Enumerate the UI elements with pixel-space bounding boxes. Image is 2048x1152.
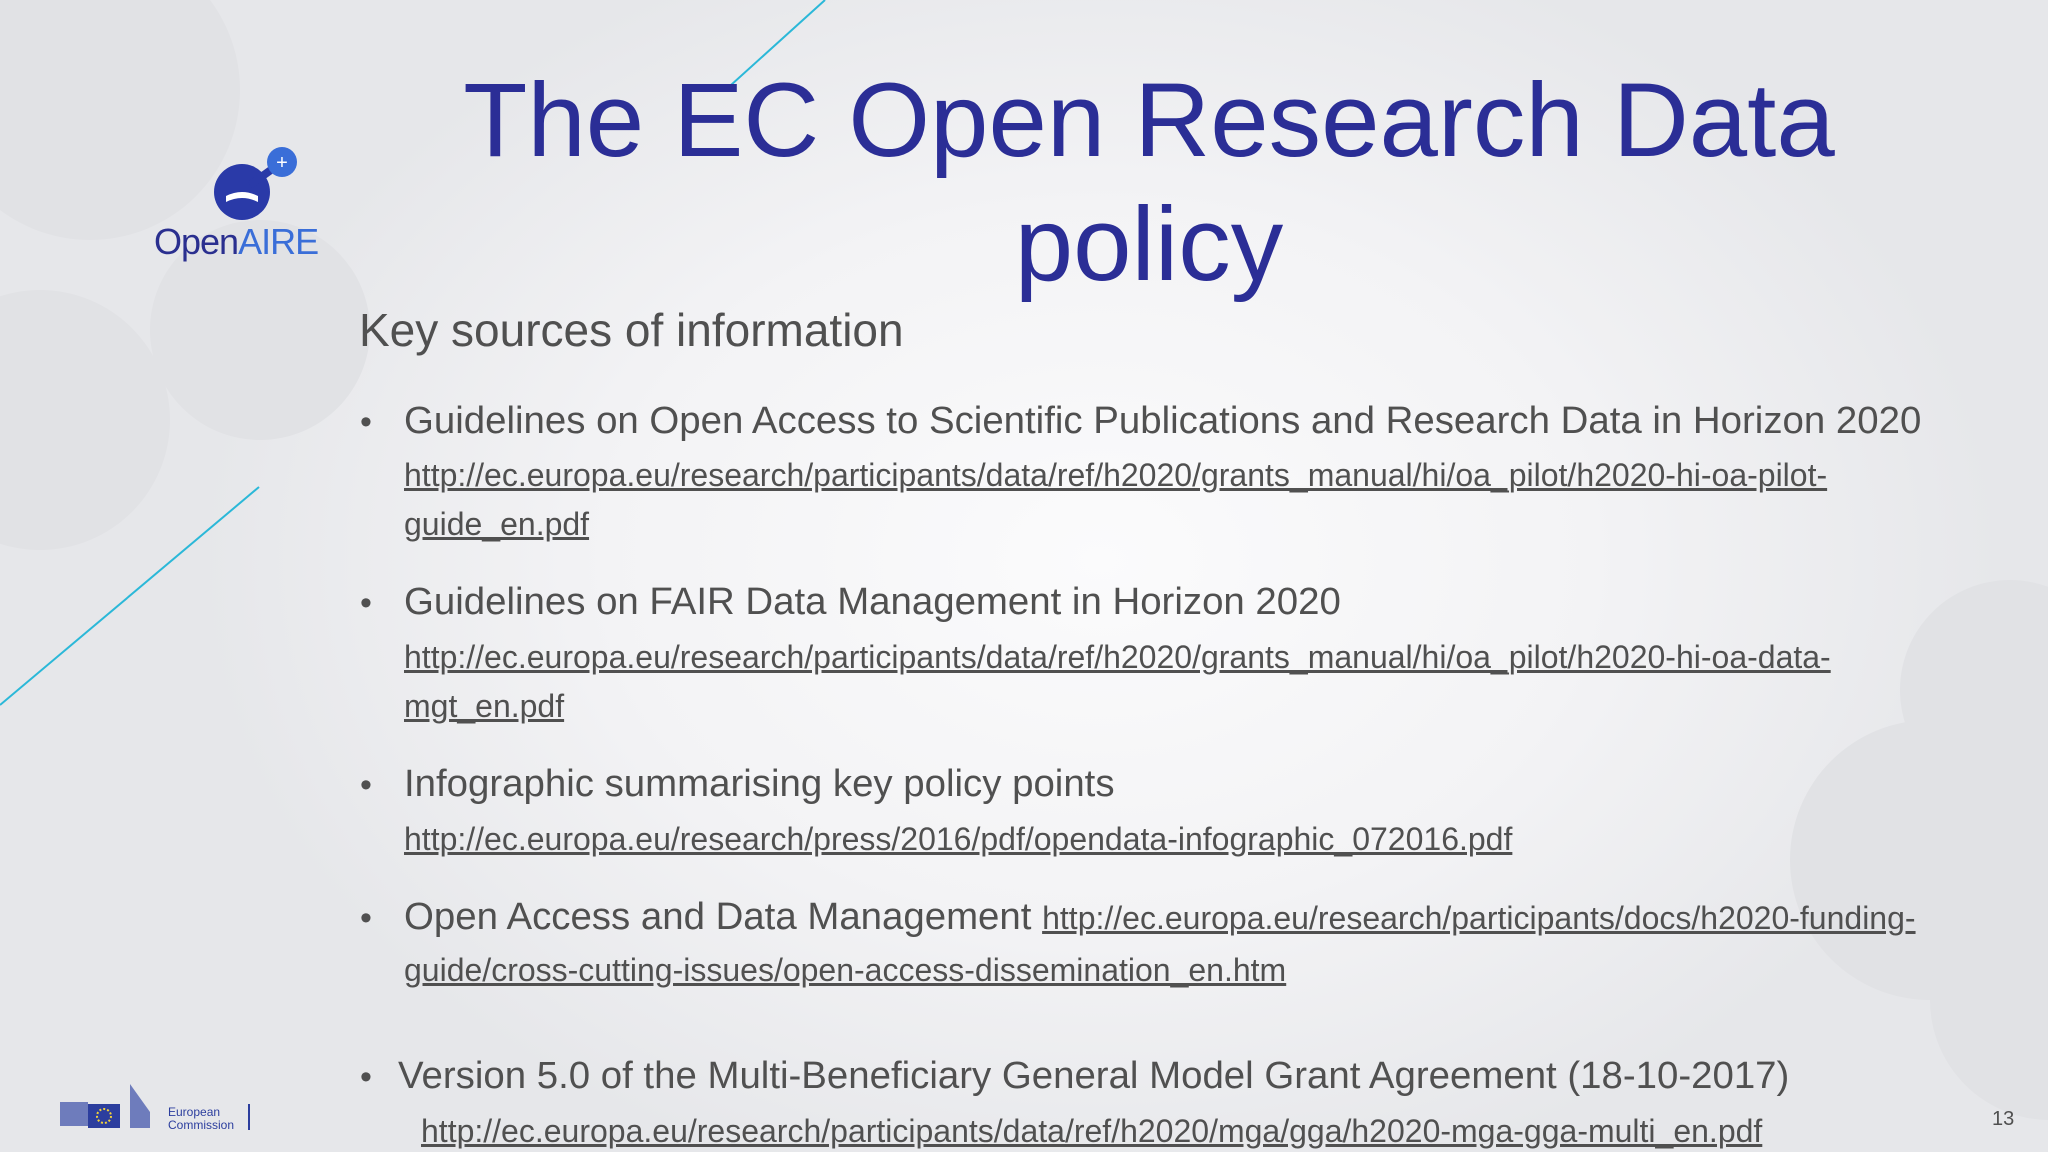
bullet 4 (360, 895, 1916, 988)
bullet 2: mgt_en.pdf (404, 688, 564, 724)
logo: OpenAIRE: + (276, 152, 288, 174)
bullet 4: guide/cross-cutting-issues/open-access-dissemination_en.htm (404, 952, 1286, 988)
bullet 5 (360, 1054, 1789, 1149)
bullet 4: Open Access and Data Management http://ec.europa.eu/research/participants/docs/h2020-funding- (404, 895, 1916, 938)
bullet 2: Guidelines on FAIR Data Management in Horizon 2020 (404, 580, 1341, 623)
bullet 3: Infographic summarising key policy points (404, 762, 1115, 805)
title: The EC Open Research Data (463, 62, 1835, 179)
bullet 5: • (360, 1058, 372, 1096)
bullet 1 (360, 399, 1921, 542)
bullet 5: http://ec.europa.eu/research/participants/data/ref/h2020/mga/gga/h2020-mga-gga-multi_en.pdf (421, 1113, 1762, 1149)
bullet 3: • (360, 766, 372, 804)
bullet 3: http://ec.europa.eu/research/press/2016/pdf/opendata-infographic_072016.pdf (404, 821, 1512, 857)
text: policy (1015, 186, 1283, 303)
bullet 4: • (360, 899, 372, 937)
bullet 2: http://ec.europa.eu/research/participants/data/ref/h2020/grants_manual/hi/oa_pilot/h2020-hi-oa-data- (404, 639, 1831, 675)
page number: 13 (1992, 1108, 2014, 1130)
subtitle: Key sources of information (359, 304, 904, 356)
bullet 2: • (360, 584, 372, 622)
logo: European Commission: Commission (168, 1118, 234, 1132)
logo: European Commission (60, 1084, 250, 1132)
bullet 1: guide_en.pdf (404, 506, 589, 542)
bullet 3 (360, 762, 1512, 857)
logo: OpenAIRE: OpenAIRE (154, 221, 318, 262)
bullet 5: Version 5.0 of the Multi-Beneficiary General Model Grant Agreement (18-10-2017) (398, 1054, 1789, 1097)
bullet 2 (360, 580, 1831, 724)
bullet 1: http://ec.europa.eu/research/participants/data/ref/h2020/grants_manual/hi/oa_pilot/h2020-hi-oa-pilot- (404, 457, 1827, 493)
logo: OpenAIRE (154, 147, 318, 262)
bullet 1: Guidelines on Open Access to Scientific Publications and Research Data in Horizon 2020 (404, 399, 1921, 442)
bullet 1: • (360, 403, 372, 441)
logo: European Commission: European (168, 1105, 220, 1119)
